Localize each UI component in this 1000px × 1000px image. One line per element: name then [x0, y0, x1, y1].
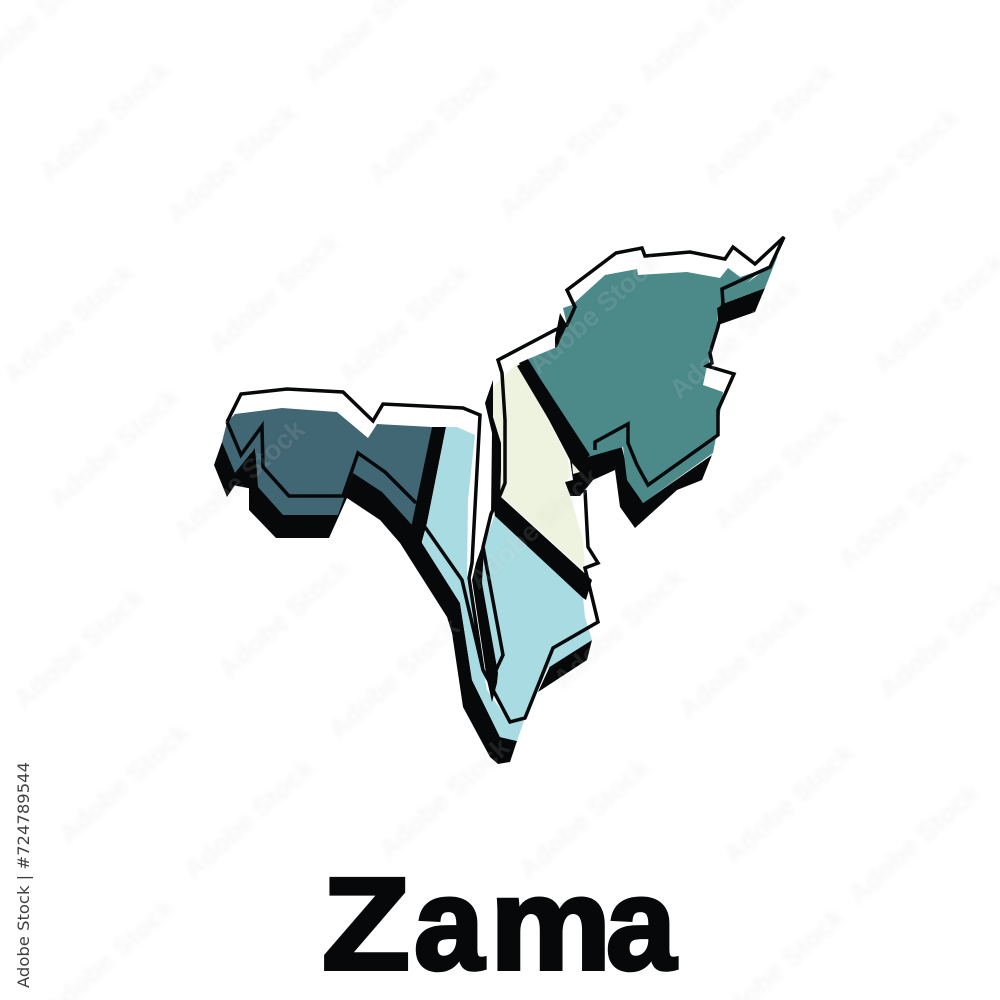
- white cut-out: east cape: [747, 272, 762, 283]
- watermark pattern: Adobe Stock: [0, 256, 141, 390]
- region: black strip south: [472, 514, 498, 702]
- title: a: [414, 852, 485, 998]
- title: Z: [322, 851, 410, 998]
- watermark pattern: Adobe Stock: [718, 736, 861, 870]
- watermark pattern: Adobe Stock: [833, 441, 976, 575]
- title: m: [490, 851, 611, 997]
- watermark pattern: Adobe Stock: [523, 246, 666, 380]
- watermark pattern: Adobe Stock: [161, 96, 304, 230]
- white cut-out: south-east notch: [586, 600, 598, 620]
- watermark pattern: Adobe Stock: [463, 461, 606, 595]
- side credit: Adobe Stock | #724789544: [14, 762, 33, 988]
- watermark pattern: Adobe Stock: [673, 591, 816, 725]
- map outline: [227, 237, 784, 722]
- watermark pattern: Adobe Stock: [203, 226, 346, 360]
- watermark pattern: Adobe Stock: [548, 561, 691, 695]
- white cut-out: east notch: [703, 366, 734, 392]
- region: black band west: [411, 427, 446, 545]
- region: teal north-east: [528, 255, 778, 503]
- watermark pattern: Adobe Stock: [708, 401, 851, 535]
- watermark pattern: Adobe Stock: [363, 56, 506, 190]
- region: cream centre: [493, 363, 585, 572]
- watermark pattern: Adobe Stock: [323, 611, 466, 745]
- watermark pattern: Adobe Stock: [34, 54, 177, 188]
- region: black band centre diagonal: [493, 497, 592, 600]
- watermark pattern: Adobe Stock: [823, 101, 966, 235]
- watermark pattern: Adobe Stock: [213, 551, 356, 685]
- map of Zama: [214, 237, 784, 764]
- watermark pattern: Adobe Stock: [8, 581, 151, 715]
- region: black strip west of cream: [485, 380, 501, 515]
- watermark pattern: Adobe Stock: [53, 716, 196, 850]
- white cut-out: small diamond: [572, 463, 580, 474]
- region: light blue south: [482, 514, 592, 722]
- watermark pattern: Adobe Stock: [168, 413, 311, 547]
- map shadow layer: [214, 288, 765, 764]
- watermark pattern: Adobe Stock: [493, 91, 636, 225]
- watermark pattern: Adobe Stock: [843, 776, 986, 910]
- watermark pattern: Adobe Stock: [178, 751, 321, 885]
- watermark pattern: Adobe Stock: [664, 271, 807, 405]
- title: [322, 851, 677, 998]
- watermark pattern: Adobe Stock: [373, 731, 516, 865]
- watermark pattern: Adobe Stock: [698, 56, 841, 190]
- watermark pattern: Adobe Stock: [333, 256, 476, 390]
- region: dark blue west: [222, 408, 432, 525]
- title: a: [606, 852, 677, 998]
- region: black band north-south: [517, 360, 590, 467]
- watermark pattern: Adobe Stock: [43, 381, 186, 515]
- region: light blue west: [422, 427, 525, 741]
- watermark pattern: Adobe Stock: [513, 751, 656, 885]
